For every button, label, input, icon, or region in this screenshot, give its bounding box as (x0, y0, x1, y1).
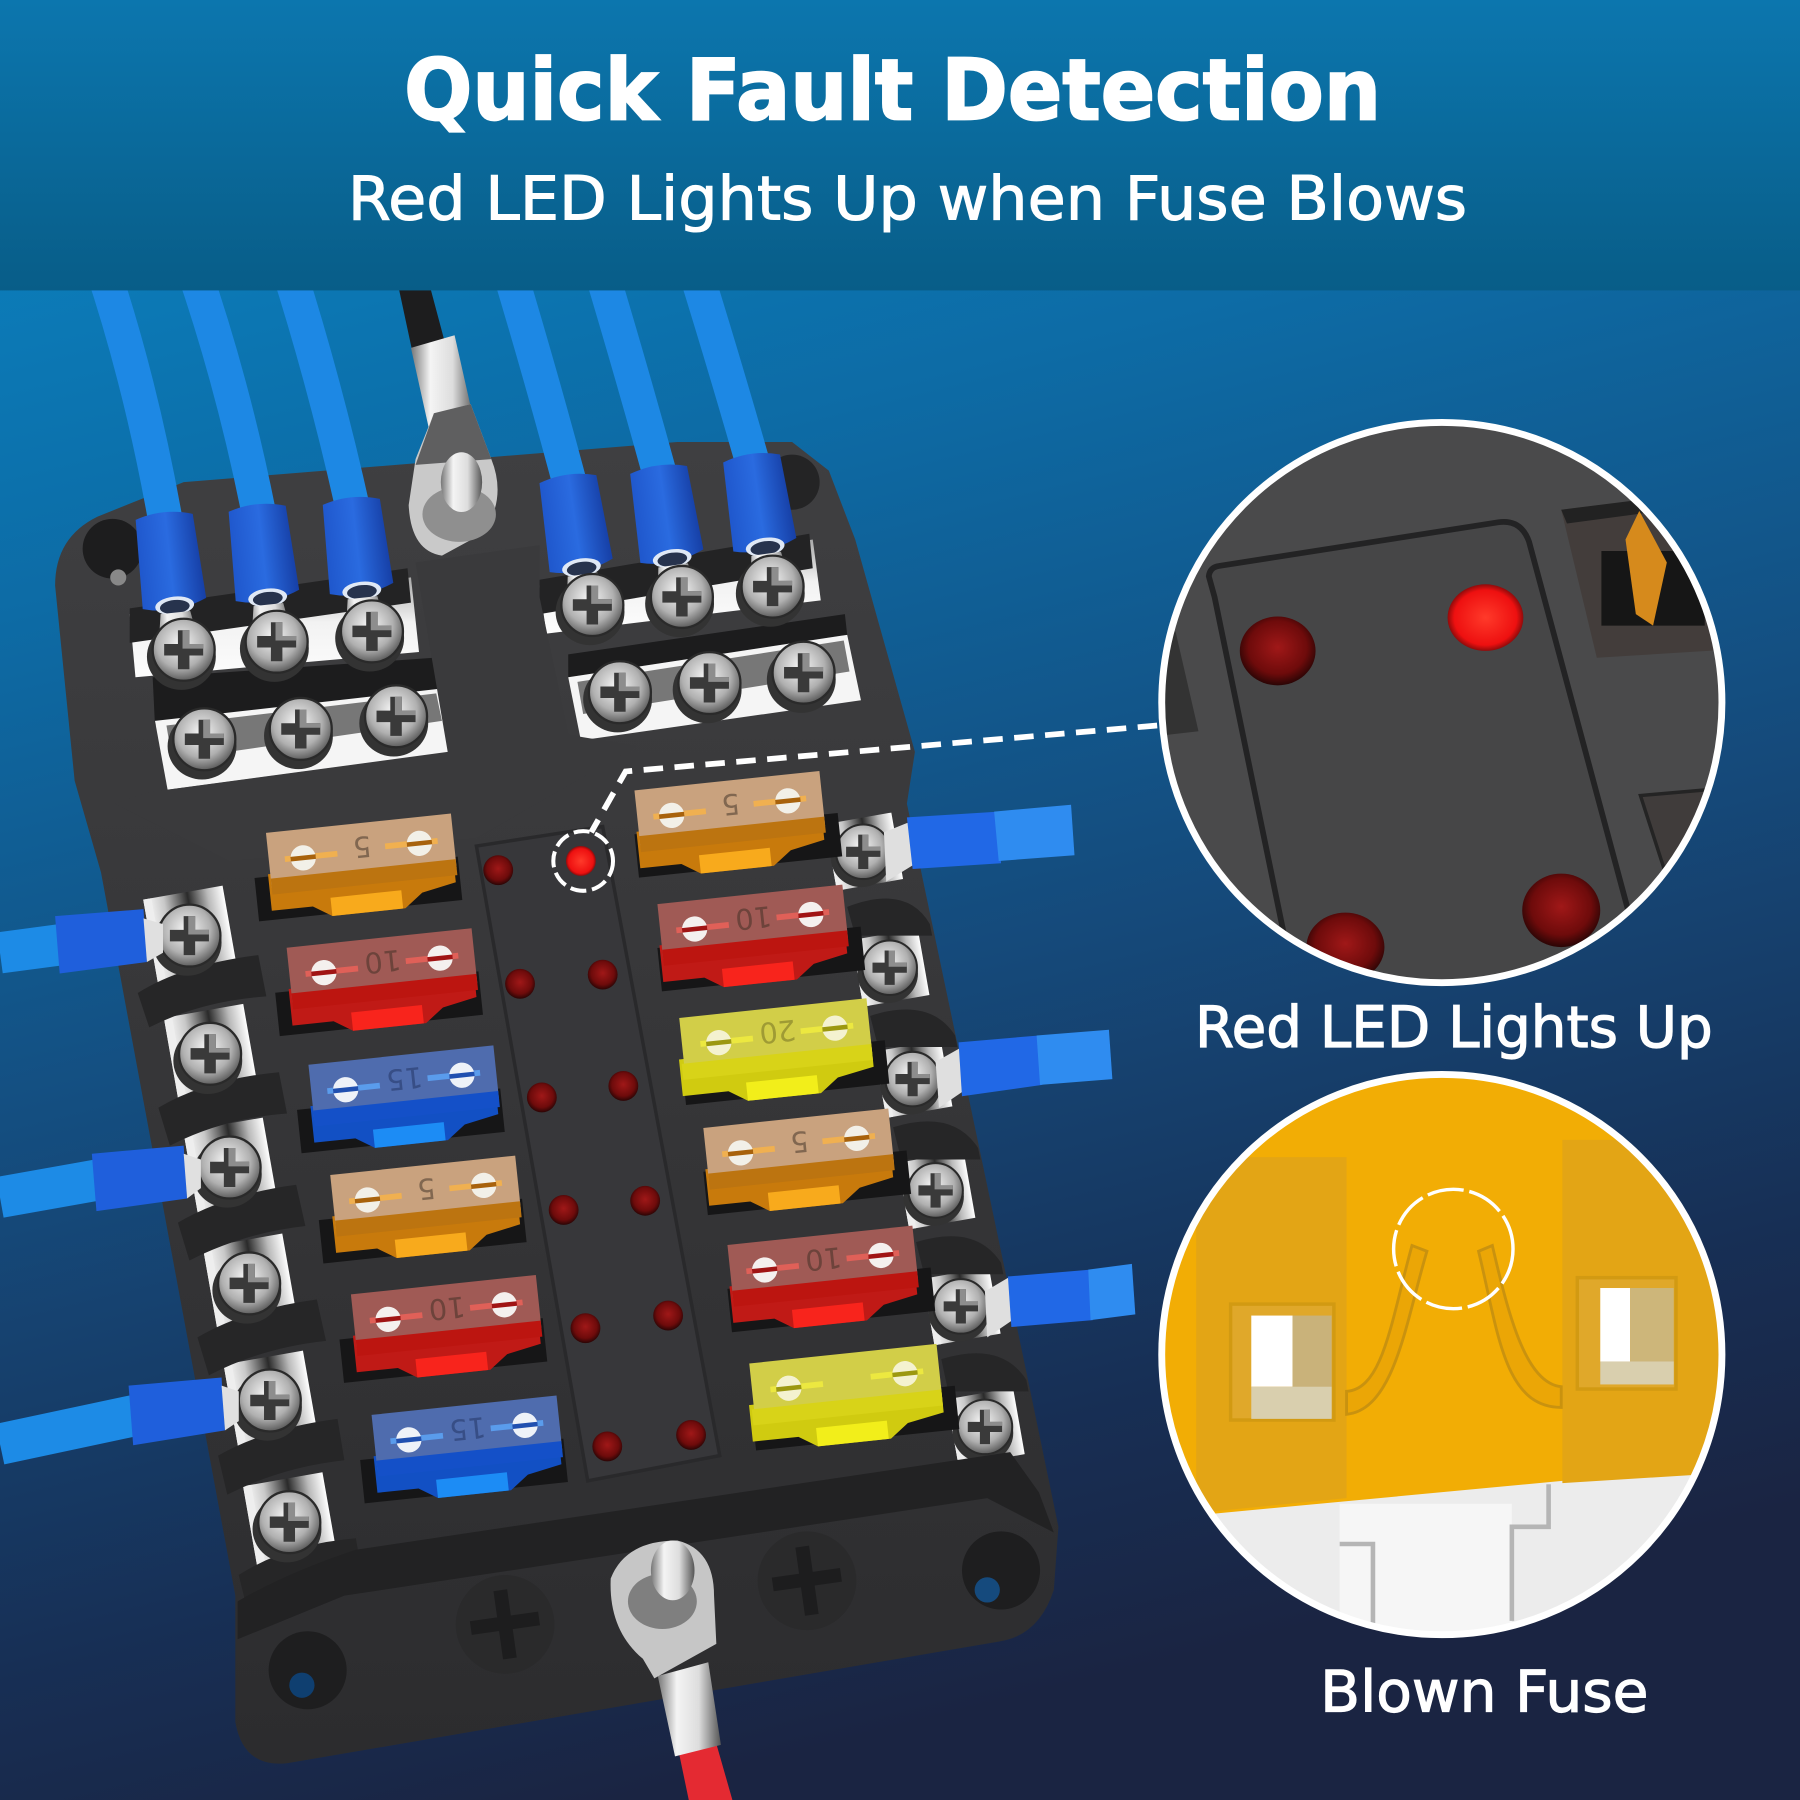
header band (0, 0, 1800, 290)
magnifier: red LED (1148, 413, 1745, 999)
lower body ledge (238, 1452, 1054, 1639)
fuse: orange 5 right: 5 (720, 786, 741, 822)
dashed circle on lit LED (553, 831, 613, 891)
side wires: left (0, 944, 140, 1444)
LED lit (1448, 584, 1523, 651)
left blue connectors (55, 909, 239, 1445)
fuse: yellow blown right (745, 1342, 960, 1453)
recess: lower right (1638, 788, 1705, 869)
left fuse leg (1196, 1157, 1347, 1513)
fuse: yellow 20 right (675, 997, 890, 1108)
fuse block body (55, 442, 1058, 1764)
top ring terminals with crimps (133, 449, 804, 657)
white base (1216, 1475, 1691, 1622)
LED dim bottom left (1306, 912, 1384, 970)
right fuse leg (1562, 1140, 1718, 1484)
fuse: blue 15 (356, 1395, 568, 1506)
recess: left (1165, 632, 1198, 735)
label: Blown Fuse: Blown Fuse (1320, 1659, 1648, 1726)
dashed circle on break (1394, 1189, 1513, 1309)
fuse: red 10: 10 (363, 943, 403, 980)
blown fuse wire (1347, 1246, 1561, 1414)
fuse: yellow 20 right: 20 (758, 1013, 798, 1050)
right front busbar (568, 614, 847, 677)
left front busbar (153, 658, 440, 726)
top blue wires (101, 264, 757, 540)
fuse: red 10 (271, 928, 483, 1038)
fuse: red 10 (335, 1275, 547, 1385)
left rear busbar (130, 577, 419, 677)
fuse: orange 5: 5 (415, 1171, 437, 1207)
subtitle: Red LED Lights Up when Fuse Blows (348, 164, 1467, 234)
recess: upper right with orange fuse (1561, 501, 1714, 658)
fuse: orange 5 (250, 813, 463, 924)
fuse: red 10: 10 (427, 1289, 467, 1327)
LED dim bottom right (1522, 874, 1600, 947)
left window (1231, 1304, 1334, 1420)
bottom red power cable and lug (611, 1541, 732, 1800)
fuse: orange 5 (314, 1155, 527, 1266)
fuse: orange 5 right (699, 1107, 911, 1217)
dashed callout line (591, 726, 1157, 832)
mounting holes and plus marks (269, 1531, 1040, 1709)
right window (1577, 1278, 1676, 1389)
top busbars (130, 534, 861, 790)
fuse: red 10 right: 10 (734, 899, 773, 937)
right blue connectors (884, 805, 1135, 1337)
label: Red LED Lights Up: Red LED Lights Up (1195, 994, 1713, 1061)
fuse: orange 5 right (630, 770, 842, 880)
LED dim (1240, 616, 1316, 685)
fuse: blue 15 (292, 1045, 505, 1156)
left side terminals (138, 886, 363, 1613)
fuse: red 10 right: 10 (804, 1240, 843, 1278)
LEDs (483, 846, 706, 1461)
fuse: red 10 right (653, 883, 865, 994)
central divider (115, 545, 637, 861)
fuse: orange 5 right: 5 (789, 1124, 810, 1160)
fuse: orange 5: 5 (351, 829, 373, 865)
LED panel (476, 827, 720, 1481)
right side terminals (825, 813, 1029, 1466)
top mounting holes (83, 455, 820, 585)
magnifier: blown fuse (1148, 1062, 1745, 1653)
title: Quick Fault Detection (404, 41, 1381, 140)
fuse: blue 15: 15 (385, 1060, 424, 1097)
top black power cable and lug (396, 276, 498, 556)
fuse: red 10 right (723, 1224, 935, 1335)
right rear busbar (540, 540, 821, 634)
fuse: blue 15: 15 (448, 1410, 488, 1448)
inner LED panel (1206, 519, 1630, 932)
top screws (147, 556, 836, 779)
